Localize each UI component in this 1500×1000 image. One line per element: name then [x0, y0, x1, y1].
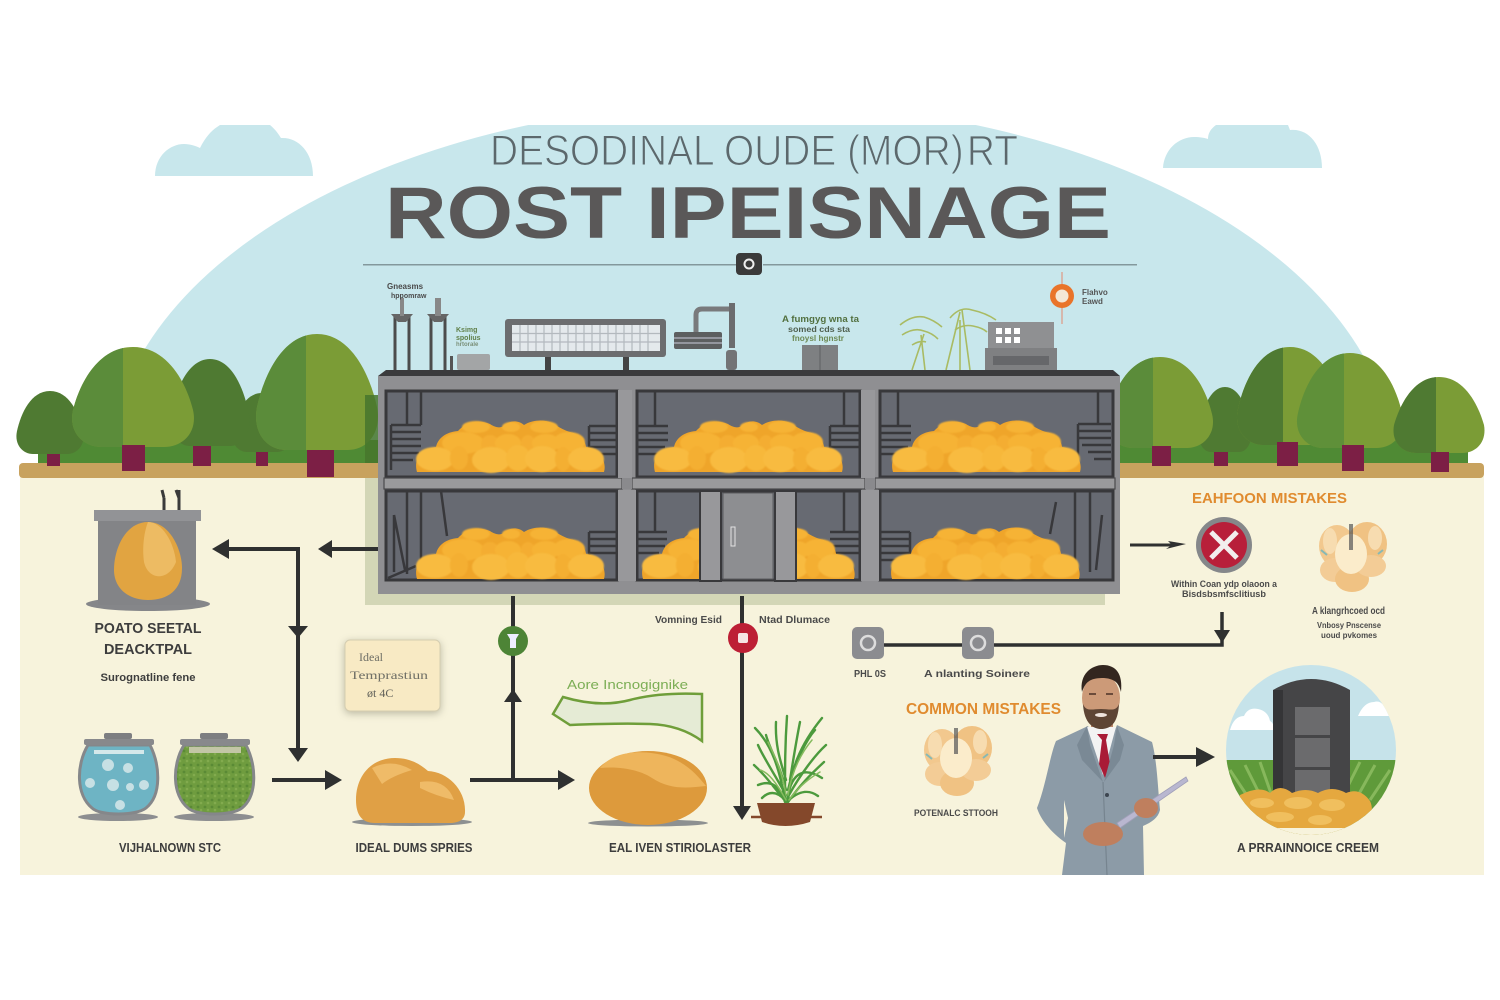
sky dome — [145, 125, 1363, 401]
sensor knob one — [852, 627, 884, 659]
building frame — [378, 376, 1120, 594]
tablet — [1117, 777, 1188, 828]
rooftop: orange target icon: Flahvo — [1082, 288, 1108, 297]
neck — [1091, 715, 1113, 731]
ideal temperature note: Ideal — [359, 650, 384, 664]
arrow connecting to mistakes — [868, 612, 1230, 645]
potato seed crate — [86, 490, 210, 611]
rooftop: small box — [450, 327, 490, 370]
label: diameter: Ntad Dlumace — [759, 615, 830, 626]
damaged potato text: uoud pvkomes — [1321, 631, 1378, 640]
storage building — [365, 370, 1120, 605]
warning text: Bisdsbsmfsclitiusb — [1182, 589, 1267, 599]
hands — [1083, 822, 1123, 846]
red valve icon — [728, 623, 758, 653]
suit — [1037, 725, 1160, 875]
head — [1082, 674, 1120, 722]
damaged potato text — [1312, 606, 1385, 640]
ground strip — [19, 463, 1484, 478]
label: potato seed — [94, 620, 202, 684]
rooftop: small box: spolius — [456, 335, 481, 342]
rooftop: antennas — [387, 282, 449, 370]
green banner: Aore Incnogignike — [567, 677, 688, 692]
potato large — [588, 751, 708, 826]
rooftop: antennas: Gneasms — [387, 282, 424, 291]
jar with greens — [174, 733, 254, 821]
label: silo: A PRRAINNOICE CREEM — [1237, 841, 1379, 855]
plant in pot — [751, 716, 826, 826]
building side shadow — [365, 395, 379, 463]
rooftop: control building — [985, 322, 1057, 370]
door and pillars — [700, 491, 721, 581]
label: jars: VIJHALNOWN STC — [119, 841, 221, 855]
rooftop: vent and pole — [674, 303, 737, 370]
silo scene — [1226, 665, 1396, 843]
building shadow — [365, 478, 1105, 605]
subtitle: DESODINAL OUDE (MOR) RT — [490, 127, 1018, 175]
cloud left — [155, 125, 313, 176]
rooftop: label and cabinet: fnoysl hgnstr — [792, 334, 844, 343]
label: knob one: PHL 0S — [854, 669, 886, 680]
ideal temperature note: Temprastiun — [350, 668, 428, 682]
ideal temperature note: øt 4C — [367, 686, 393, 700]
rooftop: label and cabinet: somed cds sta — [788, 325, 851, 334]
rooftop: label and cabinet: A fumgyg wna ta — [782, 314, 860, 324]
label: damaged potato centre: POTENALC STTOOH — [914, 808, 998, 819]
columns — [618, 390, 632, 478]
damaged potato right — [1319, 522, 1387, 592]
cloud right — [1163, 125, 1322, 168]
rooftop: orange target icon: Eawd — [1082, 297, 1103, 306]
rooms — [386, 391, 1113, 580]
trees left — [16, 334, 378, 477]
main title: ROST IPEISNAGE — [385, 173, 1111, 254]
label: knob two: A nlanting Soinere — [924, 669, 1031, 680]
green valve icon — [498, 626, 528, 656]
label: potato medium: IDEAL DUMS SPRIES — [356, 841, 472, 855]
label: potato seed: POATO SEETAL — [94, 620, 202, 637]
trees right — [1107, 347, 1484, 472]
label: large potato: EAL IVEN STIRIOLASTER — [609, 841, 751, 855]
roof — [378, 370, 1120, 376]
warning text: Within Coan ydp olaoon a — [1171, 579, 1278, 589]
arrows left network — [212, 539, 751, 820]
potato medium — [352, 758, 472, 826]
arrow to silo — [1153, 747, 1215, 767]
label: venting: Vomning Esid — [655, 615, 722, 626]
divider with icon — [363, 253, 1137, 275]
shelving racks — [388, 391, 1111, 578]
presenter — [1037, 665, 1188, 875]
damaged potato text: A klangrhcoed ocd — [1312, 606, 1385, 617]
sensor knob two — [962, 627, 994, 659]
ideal temperature note — [345, 640, 440, 711]
rooftop: label and cabinet — [782, 314, 860, 370]
warning text — [1171, 579, 1278, 599]
rooftop: orange target icon — [1050, 272, 1108, 324]
heading: mistakes top: EAHFOON MISTAKES — [1192, 490, 1347, 507]
label: potato seed: Surognatline fene — [100, 672, 196, 684]
rooftop: antennas: hppomraw — [391, 293, 427, 300]
rooftop: solar panel — [505, 319, 666, 370]
jar with water — [78, 733, 158, 821]
rooftop: plants on frames — [900, 309, 996, 370]
heading: common mistakes: COMMON MISTAKES — [906, 701, 1061, 718]
green hedge band — [38, 440, 1468, 464]
label: potato seed: DEACKTPAL — [104, 641, 192, 658]
floor slabs — [384, 478, 1115, 489]
rooftop: small box: hrtorale — [456, 342, 479, 348]
warning icon — [1196, 517, 1252, 573]
green banner — [553, 677, 702, 741]
ground — [20, 476, 1484, 875]
arrow to warning — [1130, 541, 1186, 549]
potato piles — [416, 421, 605, 473]
damaged potato text: Vnbosy Pnscense — [1317, 621, 1382, 630]
rooftop: small box: Ksimg — [456, 327, 477, 334]
damaged potato centre — [924, 726, 992, 796]
